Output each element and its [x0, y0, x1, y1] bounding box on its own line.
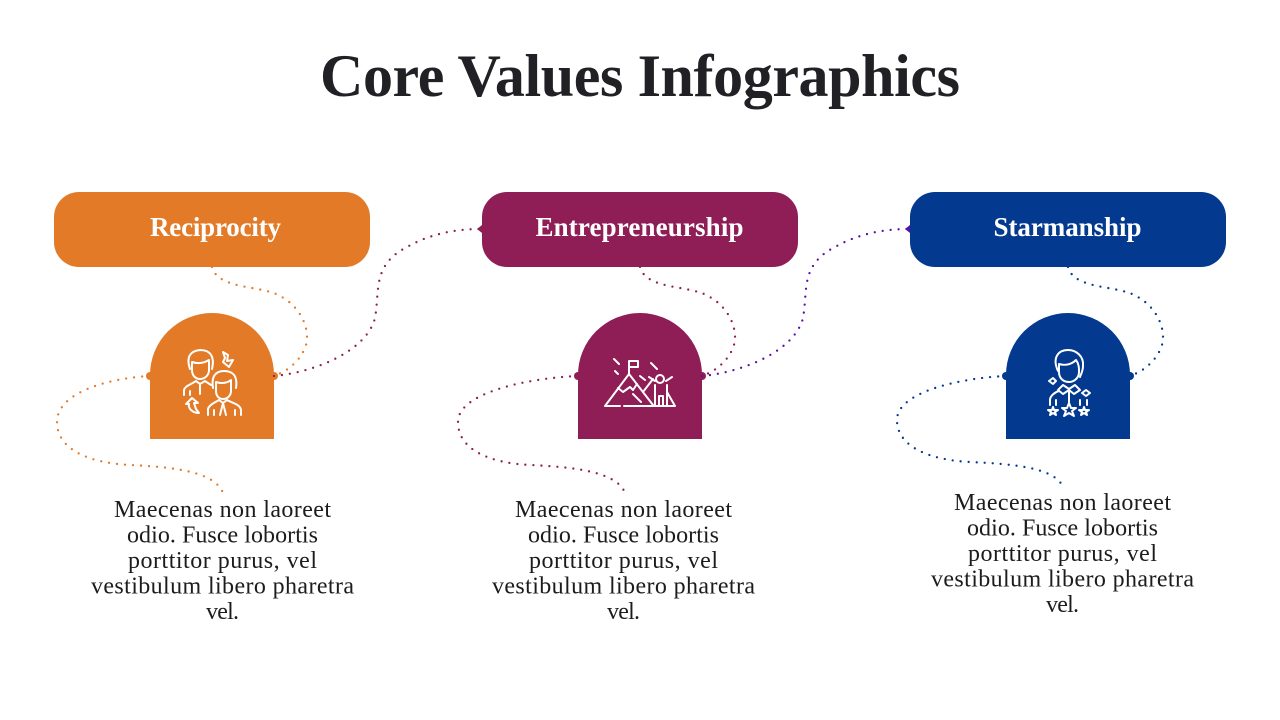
- arch: starmanship: [1002, 313, 1134, 439]
- body text: reciprocity: odio. Fusce lobortis: [127, 522, 318, 548]
- arch: reciprocity: [146, 313, 278, 439]
- icon: mountain with flag and climber: [605, 359, 675, 406]
- panel: starmanship: [897, 192, 1226, 618]
- title: Core Values Infographics: [320, 43, 960, 109]
- body text: entrepreneurship: vel.: [607, 599, 640, 625]
- panel: entrepreneurship: [458, 192, 798, 625]
- arch: entrepreneurship: [574, 313, 706, 439]
- body text: entrepreneurship: porttitor purus, vel: [529, 548, 718, 574]
- heading pill: starmanship: [905, 192, 1226, 267]
- connector: plum top curve: [640, 267, 735, 376]
- heading pill: reciprocity: [54, 192, 370, 267]
- connector: blue left curve: [897, 376, 1063, 487]
- body text: reciprocity: vel.: [206, 599, 239, 625]
- connector: blue top curve: [1068, 267, 1163, 376]
- body text: starmanship: vestibulum libero pharetra: [931, 566, 1194, 592]
- body text: starmanship: vel.: [1046, 592, 1079, 618]
- body text: starmanship: Maecenas non laoreet: [954, 490, 1171, 516]
- heading pill: reciprocity: Reciprocity: [150, 212, 282, 242]
- heading pill: entrepreneurship: Entrepreneurship: [536, 212, 744, 242]
- icon: person with stars: [1048, 350, 1090, 416]
- body text: reciprocity: Maecenas non laoreet: [114, 497, 331, 523]
- body text: starmanship: odio. Fusce lobortis: [967, 516, 1158, 542]
- panel: reciprocity: [54, 192, 370, 625]
- heading pill: entrepreneurship: [477, 192, 798, 267]
- connector: reciprocity to entrepreneurship: [274, 229, 482, 376]
- body text: entrepreneurship: Maecenas non laoreet: [515, 497, 732, 523]
- body text: entrepreneurship: [492, 497, 755, 625]
- body text: reciprocity: vestibulum libero pharetra: [91, 574, 354, 600]
- body text: entrepreneurship: odio. Fusce lobortis: [528, 522, 719, 548]
- heading pill: starmanship: Starmanship: [994, 212, 1142, 242]
- icon: two people exchanging: [184, 350, 241, 415]
- body text: starmanship: porttitor purus, vel: [968, 541, 1157, 567]
- body text: reciprocity: [91, 497, 354, 625]
- connector: entrepreneurship to starmanship: [702, 229, 910, 376]
- connector: plum left curve: [458, 376, 625, 493]
- body text: starmanship: [931, 490, 1194, 618]
- connector: orange top curve: [212, 267, 307, 376]
- connector: orange left curve: [57, 376, 223, 493]
- body text: reciprocity: porttitor purus, vel: [128, 548, 317, 574]
- body text: entrepreneurship: vestibulum libero pharetra: [492, 574, 755, 600]
